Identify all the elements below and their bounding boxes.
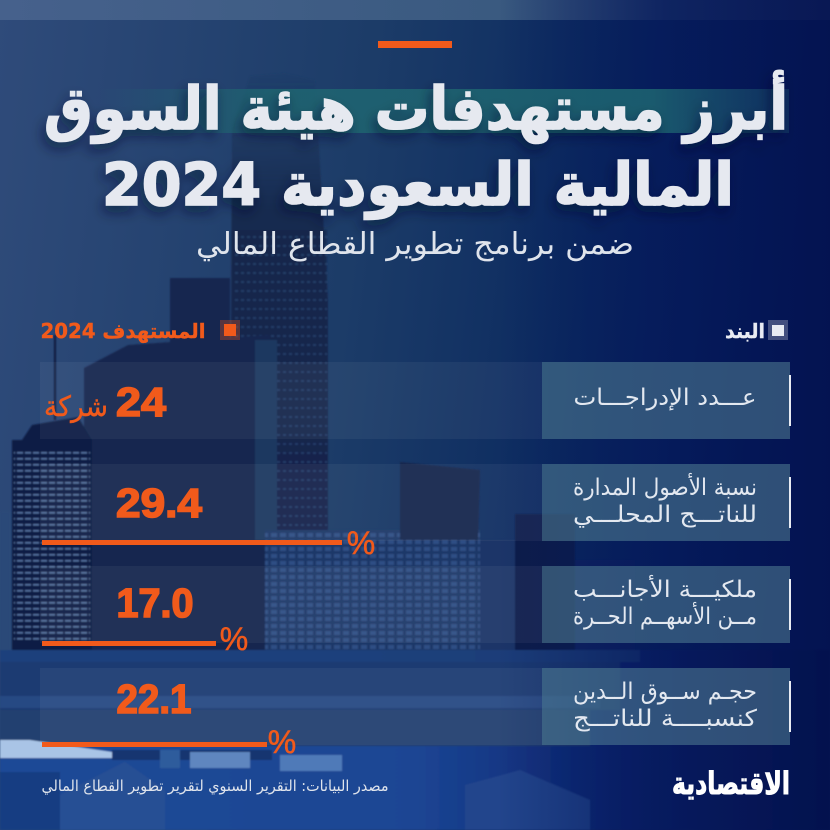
row 3: foreign ownership: ملكيـــة الأجانـــب: [573, 575, 757, 603]
subtitle: ضمن برنامج تطوير القطاع المالي: [196, 227, 634, 262]
legend: item: [725, 319, 788, 343]
row 1: listings: عـــدد الإدراجـــات: [574, 385, 756, 411]
top accent bar: [378, 41, 452, 48]
row 3: foreign ownership: 17.0: [116, 580, 194, 626]
title: [44, 70, 788, 220]
row 2: managed assets: %: [347, 525, 375, 561]
row 3: foreign ownership: %: [220, 621, 248, 657]
row 4: debt market: حجـم ســوق الــدين: [573, 679, 757, 705]
row 4: debt market: %: [268, 724, 296, 760]
row 1: listings: [40, 362, 791, 439]
legend: target: المستهدف 2024: [40, 319, 205, 343]
row 2: managed assets: 29.4: [116, 480, 202, 526]
row 2: managed assets: نسبة الأصول المدارة: [573, 473, 757, 501]
logo: الاقتصادية: [672, 766, 790, 802]
row 4: debt market: كنسبــــة للناتـــج: [573, 706, 757, 732]
row 4: debt market: [40, 668, 791, 760]
row 1: listings: شركة: [44, 390, 108, 423]
row 3: foreign ownership: مــن الأسهــم الحــرة: [573, 602, 757, 630]
legend: item: البند: [725, 319, 765, 343]
row 2: managed assets: [40, 464, 791, 561]
row 4: debt market: 22.1: [116, 676, 192, 722]
source note: مصدر البيانات: التقرير السنوي لتقرير تطوير القطاع المالي: [42, 777, 388, 796]
title: أبرز مستهدفات هيئة السوق: [44, 70, 788, 144]
row 2: managed assets: للناتـــج المحلـــي: [573, 502, 757, 528]
row 1: listings: 24: [116, 379, 166, 425]
title: المالية السعودية 2024: [102, 150, 734, 220]
row 3: foreign ownership: [40, 566, 791, 657]
title highlight band: [100, 89, 789, 133]
